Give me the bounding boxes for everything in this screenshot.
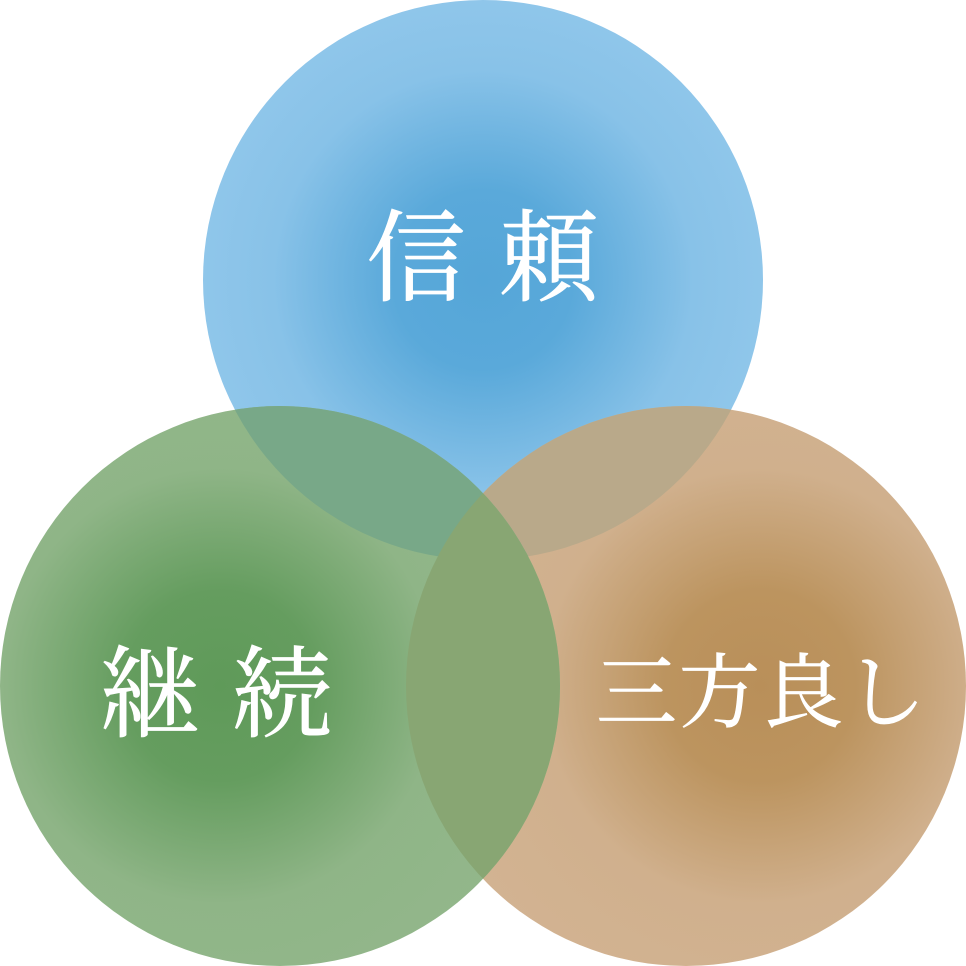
overlap: trust and sankyo-yoshi: [483, 406, 731, 556]
overlap: continuity and sankyo-yoshi: [406, 494, 560, 878]
label: continuity: 続: [232, 640, 332, 751]
label: sankyo-yoshi: 三方良し: [596, 649, 926, 739]
circle: continuity: [0, 406, 560, 966]
label: trust: 頼: [499, 204, 600, 315]
label: continuity: [100, 640, 332, 751]
label: trust: [366, 204, 600, 315]
overlap: trust and continuity: [235, 406, 528, 556]
circle: sankyo-yoshi: [406, 406, 966, 966]
label: continuity: 継: [100, 640, 200, 751]
label: trust: 信: [366, 204, 466, 315]
circle: trust: [203, 0, 763, 560]
